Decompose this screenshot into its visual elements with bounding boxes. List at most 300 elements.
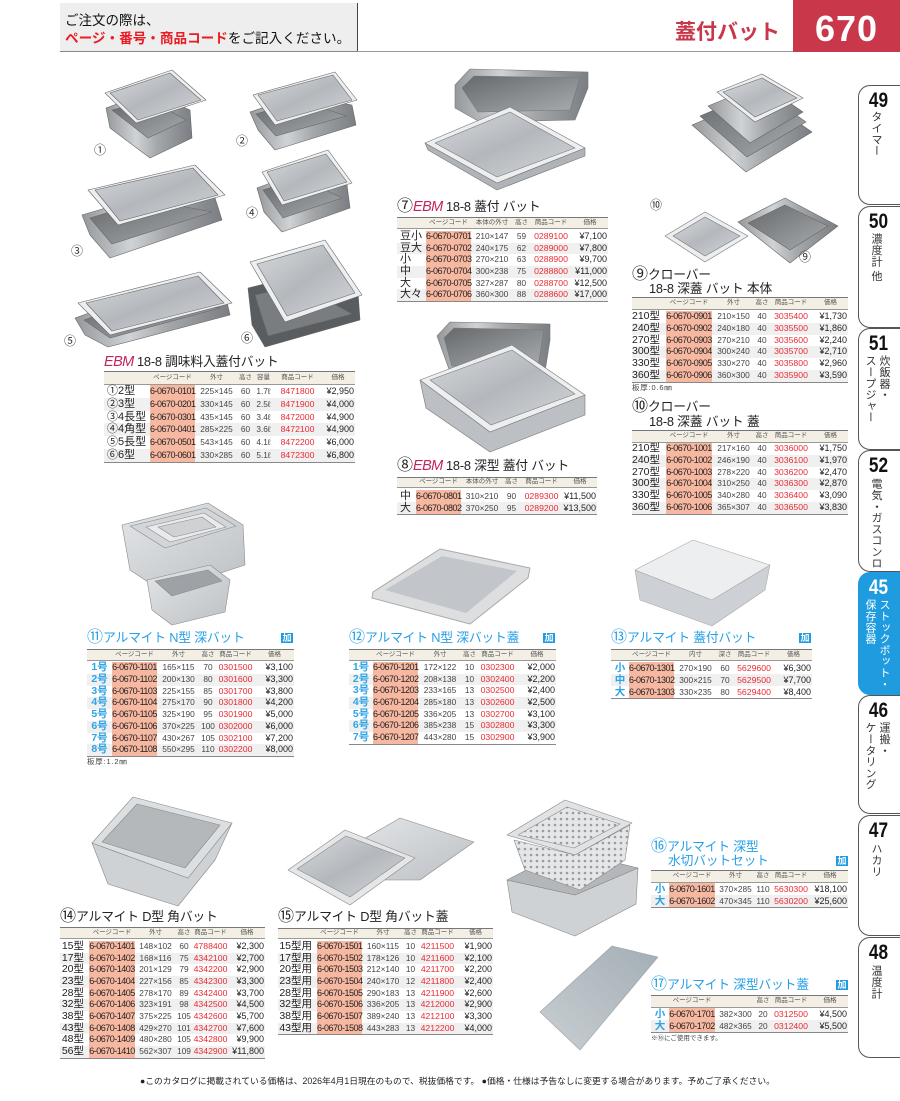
price table: 62 (517, 243, 526, 253)
price table: 豆小 (400, 230, 422, 242)
price table: 価格 (469, 929, 482, 936)
price table: 5629500 (737, 675, 771, 685)
price table: ¥11,500 (564, 491, 596, 501)
page header (60, 0, 900, 52)
heading: ⑰アルマイト 深型バット蓋 (651, 976, 809, 993)
price table (651, 995, 848, 1033)
price table: 15型用 (279, 940, 312, 952)
price table: 20 (758, 1009, 768, 1019)
badge: 加 (837, 980, 846, 990)
price table: 6-0670-1501 (317, 941, 363, 951)
price table: 270×210 (717, 335, 750, 345)
price table: 80 (203, 674, 213, 684)
tab: 48: 温度計 (870, 965, 882, 999)
price table: 10 (465, 662, 474, 672)
panel: 10 clover tray lid (632, 398, 848, 515)
price table: ¥8,400 (783, 687, 811, 697)
price table: 5号 (353, 708, 369, 720)
price table: 15 (465, 720, 474, 730)
price table: 価格 (787, 651, 800, 658)
price table: 大々 (400, 288, 422, 300)
price table: ページコード (673, 872, 711, 879)
price table: 13 (406, 988, 415, 998)
price table: 330型 (632, 489, 660, 501)
photo: tray 6 (248, 240, 362, 347)
heading line 2: 18-8 深蓋 バット 蓋 (649, 414, 759, 429)
panel: 8 EBM deep lidded tray (397, 456, 597, 515)
price table: 3.6ℓ (256, 424, 271, 434)
price table: 6-0670-1503 (317, 964, 363, 974)
price table: ¥4,000 (326, 399, 354, 409)
price table: 6-0670-1002 (666, 455, 712, 465)
tab: 46 (858, 695, 900, 814)
price table: ページコード (419, 478, 458, 485)
page number: 670 (815, 8, 878, 49)
price table: 6-0670-1505 (317, 988, 363, 998)
price table: 300型 (632, 345, 660, 357)
price table: 40 (757, 358, 767, 368)
price table: 6-0670-1408 (89, 1023, 135, 1033)
photo labels 9 and 10: ⑨ (799, 250, 811, 264)
price table: 価格 (332, 374, 344, 381)
price table: 56型 (62, 1045, 84, 1057)
price table: 2.5ℓ (256, 399, 271, 409)
price table: 高さ (239, 374, 252, 381)
price table: 6-0670-0701 (426, 231, 472, 241)
price table: 0302400 (481, 674, 514, 684)
price table: 75 (517, 266, 526, 276)
tab: 52 (858, 450, 900, 572)
photo: tray 3 (82, 165, 225, 258)
price table: 6-0670-1601 (669, 884, 715, 894)
price table: 6-0670-1103 (112, 686, 157, 696)
price table: 100 (201, 721, 215, 731)
price table: 4342300 (194, 976, 227, 986)
price table: ¥3,300 (236, 976, 264, 986)
price table: 3035900 (774, 370, 808, 380)
price table (632, 297, 848, 383)
price table: 6-0670-0501 (150, 437, 196, 447)
price table: 240×180 (717, 323, 750, 333)
price table: 20 (758, 1021, 768, 1031)
price table: ⑥6型 (107, 449, 135, 461)
price table: 深さ (718, 651, 732, 658)
price table: ¥3,800 (265, 686, 293, 696)
price table: 3035600 (774, 335, 808, 345)
price table: ¥7,800 (579, 243, 607, 253)
price table: 高さ (756, 299, 768, 306)
page number (793, 0, 900, 52)
price table: 高さ (178, 929, 190, 936)
price table: 90 (507, 491, 516, 501)
photo: clover lid (665, 212, 748, 262)
price table: 本体の外寸 (476, 219, 508, 226)
order notice box: ページ・番号・商品コードをご記入ください。 (65, 31, 350, 46)
price table: 336×205 (367, 999, 399, 1009)
price table: 325×190 (162, 709, 195, 719)
price table: 価格 (824, 872, 836, 879)
price table: 43型用 (279, 1022, 312, 1034)
price table: 0289000 (534, 243, 568, 253)
photo: tray 4 (257, 150, 352, 232)
price table: 6-0670-0901 (666, 311, 712, 321)
price table: 大 (400, 502, 411, 514)
price table: 0301700 (219, 686, 252, 696)
price table: 543×145 (200, 437, 233, 447)
heading: ⑭アルマイト D型 角バット (60, 908, 218, 925)
photo: N type lid (372, 549, 530, 624)
price table (651, 870, 848, 908)
panel: 12 alumite N deep tray lid (349, 628, 556, 745)
price table: ページコード (670, 432, 708, 439)
price table: 200×130 (162, 674, 195, 684)
price table: ¥1,750 (819, 443, 847, 453)
price table: 4212000 (421, 999, 454, 1009)
price table: 6号 (353, 719, 369, 731)
price table: 高さ (202, 651, 214, 658)
price table: ¥3,830 (819, 502, 847, 512)
price table: 5630300 (774, 884, 808, 894)
price table: 278×220 (717, 467, 750, 477)
price table: 1号 (91, 661, 108, 673)
price table: ¥2,960 (819, 358, 847, 368)
price table: ¥3,100 (527, 709, 555, 719)
price table: 商品コード (775, 432, 807, 439)
price table: 212×140 (367, 964, 399, 974)
price table: 201×129 (139, 964, 172, 974)
price table: ⑤5長型 (107, 436, 146, 448)
price table: 外寸 (434, 651, 446, 658)
price table: 562×307 (139, 1046, 172, 1056)
price table: 6-0670-0601 (150, 450, 196, 460)
tab: 49 (858, 85, 900, 205)
footer note: ●このカタログに掲載されている価格は、2026年4月1日現在のもので、税抜価格です。 ●価格・仕様は予告なしに変更する場合があります。予めご了承ください。 (140, 1076, 775, 1086)
price table: 6-0670-1502 (317, 953, 363, 963)
price table: ¥4,900 (326, 424, 354, 434)
price table: 大 (615, 686, 625, 698)
tab: 47 (858, 815, 900, 936)
heading line 2: 水切バットセット (668, 853, 769, 868)
price table: 6-0670-1204 (373, 697, 419, 707)
heading line 2: 18-8 深蓋 バット 本体 (649, 281, 772, 296)
header rule (357, 51, 793, 52)
price table: 高さ (505, 478, 518, 485)
price table: 大 (400, 277, 411, 289)
price table: 4212100 (421, 1011, 454, 1021)
price table: ¥2,700 (236, 953, 264, 963)
photo labels 1 to 6: ⑥ (241, 331, 253, 345)
heading: ⑩クローバー (632, 398, 711, 415)
price table: ¥2,600 (464, 988, 492, 998)
price table: 40 (757, 323, 767, 333)
price table: 429×270 (139, 1023, 172, 1033)
price table: 98 (179, 999, 189, 1009)
price table: 商品コード (775, 299, 807, 306)
order notice box (60, 3, 358, 52)
price table: 40 (757, 502, 767, 512)
price table: 360型 (632, 501, 660, 513)
price table: 外寸 (727, 432, 740, 439)
price table: 7号 (353, 731, 369, 743)
price table: ページコード (376, 651, 415, 658)
price table: ¥2,240 (819, 335, 847, 345)
price table: ページコード (93, 929, 131, 936)
price table: 高さ (756, 432, 768, 439)
price table: 340×280 (717, 490, 750, 500)
note: sheet thickness: 板厚:0.6㎜ (632, 383, 673, 392)
price table: 3036500 (774, 502, 808, 512)
price table: ¥2,900 (236, 964, 264, 974)
price table: 外寸 (149, 929, 162, 936)
price table: 0302900 (481, 732, 514, 742)
price table: 105 (177, 1034, 191, 1044)
price table: 13 (406, 999, 415, 1009)
price table: 価格 (824, 432, 837, 439)
price table: ¥2,300 (236, 941, 264, 951)
price table: 15型 (62, 940, 84, 952)
price table: 0302700 (481, 709, 514, 719)
price table: 6-0670-1402 (89, 953, 135, 963)
price table: 3号 (91, 684, 108, 696)
price table: 高さ (515, 219, 528, 226)
price table: 容量 (257, 374, 270, 381)
price table: 本体の外寸 (466, 478, 498, 485)
price table: 435×145 (200, 412, 233, 422)
price table: 6-0670-1004 (666, 478, 712, 488)
price table: 3035700 (774, 346, 808, 356)
price table: 4342100 (194, 953, 227, 963)
photo: alumite lidded tray (635, 540, 770, 626)
price table: 330×235 (679, 687, 712, 697)
price table: 1.7ℓ (256, 386, 271, 396)
price table: ¥25,600 (814, 896, 847, 906)
price table: 178×126 (367, 953, 399, 963)
price table: 60 (241, 450, 250, 460)
price table: ¥5,500 (819, 1021, 847, 1031)
price table: ¥1,730 (819, 311, 847, 321)
price table: 8471800 (281, 386, 314, 396)
price table: 1号 (353, 661, 369, 673)
price table: ¥4,500 (236, 999, 264, 1009)
price table: ③4長型 (107, 411, 146, 423)
price table: 5629400 (737, 687, 771, 697)
photo labels 1 to 6: ① (94, 143, 106, 157)
price table: 227×156 (139, 976, 172, 986)
price table: 110 (756, 884, 770, 894)
price table: 0288800 (534, 266, 568, 276)
price table: 327×287 (476, 278, 508, 288)
price table: 0302500 (481, 685, 514, 695)
price table (104, 371, 355, 463)
price table: 8471900 (281, 399, 314, 409)
price table: 6-0670-1602 (669, 896, 715, 906)
price table: 6-0670-1106 (112, 721, 157, 731)
price table: ¥4,900 (326, 412, 354, 422)
price table: 2号 (91, 673, 108, 685)
price table: 外寸 (376, 929, 390, 936)
photo labels 1 to 6: ② (236, 134, 248, 148)
price table: 小 (655, 883, 665, 895)
price table: 6-0670-1303 (629, 687, 675, 697)
heading: ⑪アルマイト N型 深バット (87, 629, 245, 646)
price table: 40 (757, 335, 767, 345)
price table: ページコード (670, 299, 708, 306)
badge: 加 (282, 633, 292, 643)
price table: 443×283 (367, 1023, 399, 1033)
heading: ⑨クローバー (632, 266, 711, 283)
price table: 6-0670-1508 (317, 1023, 363, 1033)
price table: ¥2,950 (326, 386, 354, 396)
price table: ¥7,600 (236, 1023, 264, 1033)
price table: 4788400 (194, 941, 227, 951)
price table: 101 (177, 1023, 191, 1033)
price table: ②3型 (107, 398, 135, 410)
tab: 45 active: 保存容器 (864, 599, 876, 644)
price table: 6-0670-1506 (317, 999, 363, 1009)
price table: 4342400 (194, 988, 227, 998)
price table: 0301800 (219, 697, 252, 707)
price table (611, 649, 812, 699)
price table: 小 (615, 662, 625, 674)
price table: 360×300 (717, 370, 750, 380)
price table: 4342200 (194, 964, 227, 974)
price table: ¥8,000 (265, 744, 293, 754)
price table: 375×225 (139, 1011, 172, 1021)
price table: 270型 (632, 466, 660, 478)
price table: 商品コード (481, 651, 514, 658)
price table: 370×225 (162, 721, 195, 731)
heading: ⑬アルマイト 蓋付バット (611, 629, 756, 646)
price table: 210×147 (476, 231, 508, 241)
price table: 8472100 (281, 424, 314, 434)
panel: 13 alumite lidded tray (611, 628, 812, 699)
price table: 0302600 (481, 697, 514, 707)
price table: 13 (465, 709, 474, 719)
price table: 3036000 (774, 443, 808, 453)
price table: ¥9,900 (236, 1034, 264, 1044)
price table: 3035500 (774, 323, 808, 333)
tab: 47: 47 (869, 819, 888, 842)
price table: 0288700 (534, 278, 568, 288)
price table: 6-0670-1405 (89, 988, 135, 998)
tab: 52: 52 (869, 454, 888, 477)
price table: 4211700 (421, 964, 454, 974)
badge: 加 (544, 633, 554, 643)
price table: 4号 (91, 696, 108, 708)
price table: 6-0670-0401 (150, 424, 196, 434)
price table: ¥2,500 (527, 697, 555, 707)
price table: 0289200 (525, 503, 558, 513)
panel: 15 alumite D square tray lid (278, 908, 493, 1035)
price table: 389×240 (367, 1011, 399, 1021)
price table: 6-0670-1702 (669, 1021, 715, 1031)
price table: 商品コード (421, 929, 454, 936)
price table: 小 (400, 253, 411, 265)
price table (397, 477, 597, 515)
price table: 小 (655, 1008, 665, 1020)
photo: tray 1 (105, 70, 206, 158)
price table: 246×190 (717, 455, 750, 465)
price table: 300×240 (717, 346, 750, 356)
price table: 13 (406, 1023, 415, 1033)
price table: 88 (517, 289, 526, 299)
price table: 300×215 (679, 675, 712, 685)
price table: ①2型 (107, 385, 135, 397)
heading: ⑮アルマイト D型 角バット蓋 (278, 908, 448, 925)
price table: 70 (720, 675, 730, 685)
price table: 価格 (824, 997, 836, 1004)
price table: 360型 (632, 369, 660, 381)
sidebar category tabs (858, 85, 900, 1058)
price table: 60 (241, 412, 250, 422)
price table: 4342700 (194, 1023, 227, 1033)
price table: 8号 (91, 743, 108, 755)
photo labels 1 to 6: ③ (71, 244, 83, 258)
price table: ¥1,900 (464, 941, 492, 951)
price table: 6-0670-0101 (150, 386, 196, 396)
order notice box: ご注文の際は、 (65, 13, 160, 28)
price table: ¥2,400 (527, 685, 555, 695)
price table: ページコード (429, 219, 468, 226)
photo: clover tray (738, 198, 838, 263)
price table: 6号 (91, 720, 108, 732)
price table: 0301600 (219, 674, 252, 684)
price table: 3号 (353, 684, 369, 696)
price table (278, 928, 493, 1035)
price table: 20型 (62, 963, 84, 975)
heading: ⑧EBM 18-8 深型 蓋付 バット (397, 457, 569, 474)
photo: perforated basket and deep tray set (507, 800, 638, 936)
price table: 0289100 (534, 231, 568, 241)
panel: EBM seasoning tray (104, 354, 355, 463)
price table: 59 (517, 231, 526, 241)
price table: 208×138 (424, 674, 456, 684)
price table: ¥6,800 (326, 450, 354, 460)
price table: 3035400 (774, 311, 808, 321)
price table: ¥1,970 (819, 455, 847, 465)
price table: 48型 (62, 1033, 84, 1045)
price table: 148×102 (139, 941, 172, 951)
price table: 370×285 (719, 884, 752, 894)
price table (349, 649, 556, 745)
price table: ¥6,000 (265, 721, 293, 731)
price table: 300型 (632, 477, 660, 489)
tab: 47: ハカリ (870, 843, 882, 877)
price table: 470×345 (719, 896, 752, 906)
price table: 17型用 (279, 952, 312, 964)
price table: 38型 (62, 1010, 84, 1022)
price table: 5630200 (774, 896, 808, 906)
price table: 40 (757, 311, 767, 321)
price table: 60 (241, 424, 250, 434)
price table: 0288600 (534, 289, 568, 299)
price table: 高さ (756, 872, 770, 879)
price table: 270×190 (679, 663, 712, 673)
price table: 40 (757, 478, 767, 488)
price table: 60 (241, 399, 250, 409)
price table: 内寸 (689, 651, 702, 658)
price table: 6-0670-0201 (150, 399, 196, 409)
tab: 50: 濃度計 他 (870, 233, 882, 282)
price table: 4.1ℓ (256, 437, 271, 447)
price table: 0301900 (219, 709, 252, 719)
price table: 6-0670-0904 (666, 346, 712, 356)
price table: 40 (757, 443, 767, 453)
price table: 中 (400, 265, 411, 277)
price table: 6-0670-0801 (416, 491, 462, 501)
tab: 51: 51 (869, 332, 888, 355)
price table: 3.4ℓ (256, 412, 271, 422)
